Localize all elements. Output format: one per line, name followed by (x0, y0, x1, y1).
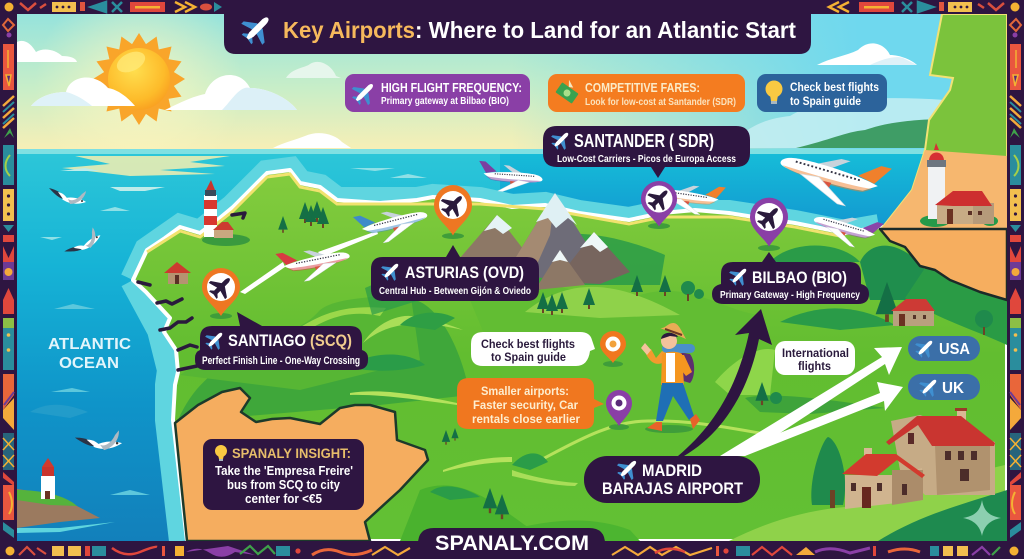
airport label: Santander: Low-Cost Carriers - Picos de Europa Access (557, 153, 736, 165)
callout: check best flights: to Spain guide (491, 350, 566, 364)
departure label: Madrid Barajas: MADRID (642, 461, 702, 480)
benefit pill: competitive fares: Look for low-cost at Santander (SDR) (585, 97, 736, 108)
benefit pill: high flight frequency: HIGH FLIGHT FREQUENCY: (381, 81, 522, 95)
destination pill: UK (908, 373, 980, 400)
heading (224, 0, 811, 54)
island lighthouse: south-west (17, 458, 115, 533)
map pin: Santander (641, 181, 677, 229)
airport label: Bilbao: BILBAO (BIO) (752, 269, 847, 287)
airport label: Asturias: Central Hub - Between Gijón & Oviedo (379, 285, 531, 297)
sparkle mark (963, 500, 1001, 536)
destination pill: UK: UK (942, 380, 964, 397)
callout: international flights: International (782, 346, 849, 360)
callout: international flights (775, 341, 855, 375)
callout: smaller airports (457, 378, 604, 429)
sea (17, 149, 1007, 541)
guide pill: check best flights: to Spain guide (790, 94, 861, 108)
departure label: Madrid Barajas: BARAJAS AIRPORT (602, 479, 744, 498)
heading: Key Airports (283, 17, 415, 43)
east cliff strip (880, 14, 1007, 300)
Atlantic Ocean label: ATLANTIC (48, 336, 131, 353)
callout: international flights: flights (798, 359, 831, 373)
airport label: Santiago (195, 312, 368, 370)
benefit pill: competitive fares: COMPETITIVE FARES: (585, 81, 700, 95)
benefit pill: competitive fares (548, 74, 745, 112)
mainland (133, 170, 1007, 541)
small cottage: north-west (164, 262, 191, 284)
airport label: Santiago: Perfect Finish Line - One-Way Crossing (202, 355, 360, 367)
flight trails (240, 231, 378, 294)
orange region: south-west (175, 388, 428, 541)
footer brand tab (418, 528, 605, 559)
small pin: purple (606, 390, 632, 430)
airport label: Bilbao (712, 252, 869, 304)
icon: plane in heading (236, 8, 278, 50)
airport label: Asturias (371, 245, 539, 301)
map pin: Santiago (202, 268, 240, 319)
insight box (203, 439, 364, 510)
heading: : Where to Land for an Atlantic Start (415, 17, 796, 43)
stone farmhouses (811, 408, 995, 509)
sky (17, 0, 1007, 190)
footer brand tab: SPANALY.COM (435, 532, 589, 555)
insight box: center for <€5 (245, 492, 322, 506)
destination pill: USA: USA (939, 341, 970, 358)
callout: smaller airports: rentals close earlier (472, 412, 580, 426)
airport label: Santiago: SANTIAGO (228, 331, 306, 350)
guide pill: check best flights: Check best flights (790, 80, 879, 94)
icon: light bulb (766, 80, 782, 104)
insight box: SPANALY INSIGHT: (232, 446, 351, 461)
cottage: east hills (891, 299, 935, 326)
insight box: Take the 'Empresa Freire' (215, 464, 353, 478)
western coast inlets (138, 213, 245, 370)
guide pill: check best flights (757, 74, 887, 112)
departure label: Madrid Barajas (584, 454, 760, 503)
map pin: Bilbao (750, 198, 788, 251)
callout: check best flights (471, 332, 595, 366)
Atlantic Ocean label: OCEAN (59, 355, 119, 372)
airport label: Asturias: ASTURIAS (OVD) (405, 263, 524, 282)
benefit pill: high flight frequency: Primary gateway at Bilbao (BIO) (381, 96, 509, 107)
benefit pill: high flight frequency (345, 74, 530, 112)
arrow: Madrid to Bilbao (678, 309, 772, 456)
airport label: Santander (543, 126, 750, 178)
arrow: international route to UK (722, 382, 903, 456)
lighthouse: north-west (202, 180, 250, 246)
icon: insight light bulb (215, 445, 227, 461)
traveler figure (641, 323, 700, 433)
hills and forest patches (178, 234, 1007, 541)
Atlantic Ocean label (48, 336, 131, 372)
airport label: Bilbao: Primary Gateway - High Frequency (720, 289, 860, 301)
mountains (460, 193, 630, 290)
airplanes (275, 142, 892, 285)
arrow: international route to USA (720, 347, 902, 456)
destination pill: USA (908, 334, 980, 361)
clouds (17, 41, 945, 148)
map pin: Asturias (434, 185, 472, 239)
small pin: orange (600, 331, 626, 367)
callout: smaller airports: Faster security, Car (473, 398, 578, 412)
icon: money (555, 77, 582, 104)
insight box: bus from SCQ to city (227, 478, 340, 492)
forest trees (278, 201, 993, 519)
seagulls (49, 188, 123, 456)
callout: smaller airports: Smaller airports: (481, 384, 569, 398)
distant green headland (796, 119, 940, 148)
airport label: Santiago: (SCQ) (310, 331, 352, 350)
callout: check best flights: Check best flights (481, 337, 575, 351)
airport label: Santander: SANTANDER ( SDR) (574, 130, 714, 151)
lighthouse and house: east (920, 143, 998, 227)
sun (93, 33, 185, 125)
coastal shallows (133, 170, 879, 541)
